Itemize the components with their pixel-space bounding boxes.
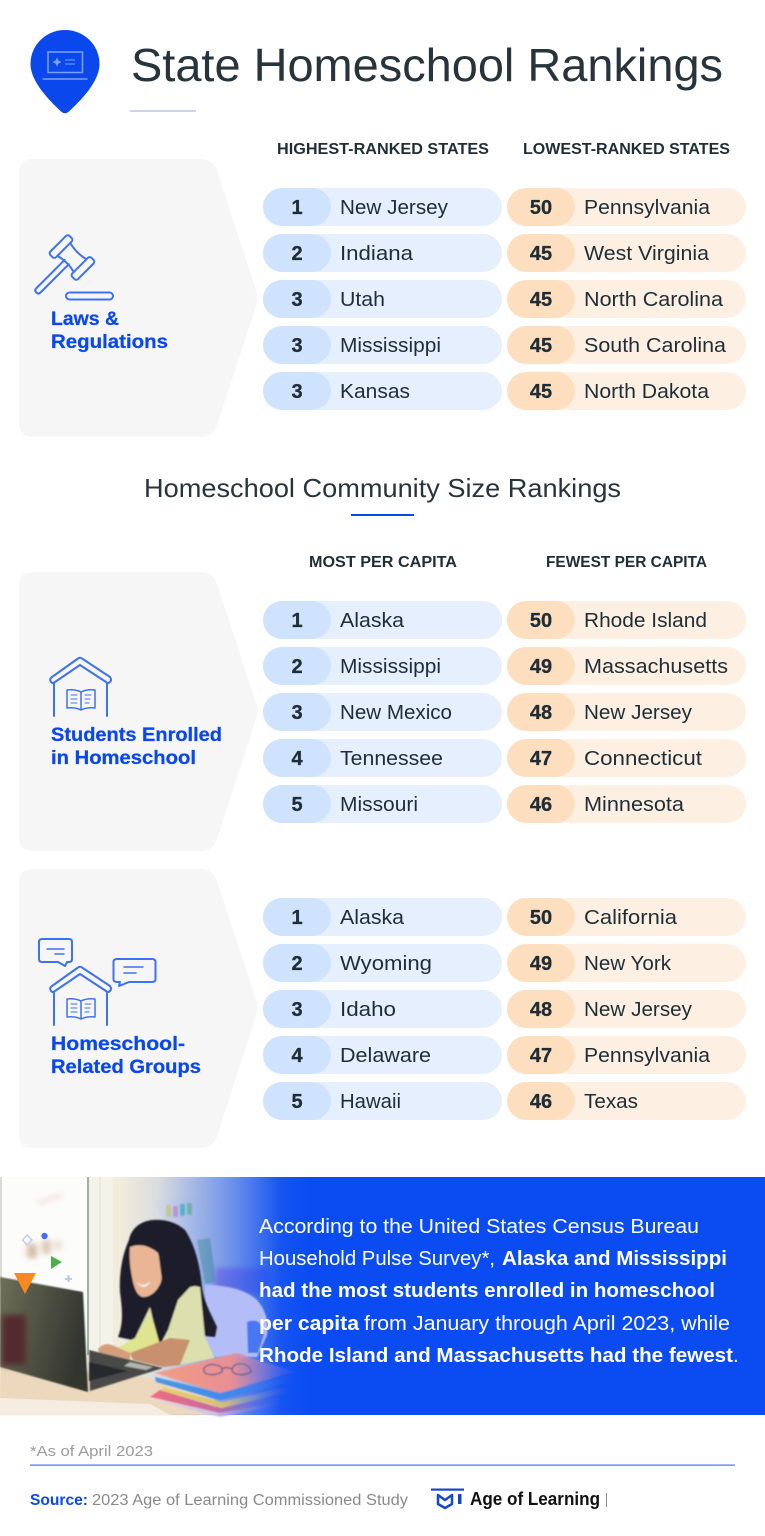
chair cushion [205,1285,268,1357]
source line: Source: [30,1492,88,1509]
rows: most per capita: Mississippi [340,655,441,678]
rows: groups fewest: 50 [530,907,552,929]
label: homeschool-related groups: Homeschool- [51,1033,185,1055]
photo: girl at laptop [0,1177,310,1417]
rows: laws lowest-ranked: 45 [530,243,552,265]
rows: groups fewest: Pennsylvania [584,1044,711,1067]
rows: groups fewest: New York [584,952,672,975]
rows: laws highest-ranked: 3 [291,335,303,357]
panel: homeschool-related groups [19,869,258,1148]
callout text: Rhode Island and Massachusetts had the fewest [259,1344,733,1367]
column headers: per capita: FEWEST PER CAPITA [546,554,707,571]
label: students enrolled in homeschool [51,724,222,769]
column headers: per capita [309,554,707,571]
icon: house with book [50,658,111,716]
callout text: from January through April 2023, while [364,1312,730,1335]
rows: laws highest-ranked: 1 [291,197,303,219]
source line: 2023 Age of Learning Commissioned Study [92,1492,408,1509]
rows: fewest per capita: 46 [530,794,552,816]
icon: gavel [23,234,113,307]
section heading: community size: Homeschool Community Size Rankings [144,473,621,503]
rows: most per capita: 1 [291,610,303,632]
rows: fewest per capita: 49 [530,656,552,678]
rows: groups fewest [507,898,746,1120]
label: laws and regulations [51,308,168,353]
column headers: per capita: MOST PER CAPITA [309,554,457,571]
panel: students enrolled in homeschool [19,572,258,851]
rows: most per capita: 2 [291,656,303,678]
table [0,1362,215,1415]
rows: laws highest-ranked: 2 [291,243,303,265]
rows: groups most: 3 [291,999,303,1021]
rows: laws lowest-ranked [507,188,746,410]
rows: groups fewest: 47 [530,1045,552,1067]
footnote: *As of April 2023 [30,1443,153,1460]
title underline [130,110,196,112]
rows: fewest per capita: New Jersey [584,701,693,724]
section heading underline [351,514,414,516]
rows: most per capita: New Mexico [340,701,452,724]
callout text: . [733,1344,739,1367]
rows: laws lowest-ranked: Pennsylvania [584,196,711,219]
rows: fewest per capita [507,601,746,823]
rows: fewest per capita: 47 [530,748,552,770]
rows: laws highest-ranked: Kansas [340,380,410,403]
column headers: laws [277,141,730,158]
rows: most per capita: Tennessee [340,747,443,770]
rows: groups most [263,898,502,1120]
rows: groups most: 2 [291,953,303,975]
panel: laws and regulations [19,159,258,437]
rows: most per capita: 5 [291,794,303,816]
rows: groups fewest: Texas [584,1090,638,1113]
rows: laws highest-ranked: 3 [291,381,303,403]
rows: laws highest-ranked: New Jersey [340,196,449,219]
rows: fewest per capita: Connecticut [584,747,702,770]
rows: groups fewest: 46 [530,1091,552,1113]
rows: laws lowest-ranked: 45 [530,289,552,311]
rows: most per capita: Missouri [340,793,418,816]
rows: groups most: Hawaii [340,1090,401,1113]
rows: groups fewest: New Jersey [584,998,693,1021]
girl [98,1220,217,1367]
callout text [259,1215,739,1367]
callout text: had the most students enrolled in homeschool [259,1279,715,1302]
rows: fewest per capita: 48 [530,702,552,724]
rows: fewest per capita: 50 [530,610,552,632]
rows: groups fewest: 49 [530,953,552,975]
rows: laws lowest-ranked: North Carolina [584,288,724,311]
rows: groups most: Wyoming [340,952,432,975]
footer rule [30,1464,735,1466]
label: homeschool-related groups [51,1033,201,1078]
icon: plus [65,1275,72,1282]
callout text: According to the United States Census Bureau [259,1215,699,1238]
logo: Age of Learning: Age of Learning [470,1488,600,1509]
rows: groups fewest: California [584,906,678,929]
label: homeschool-related groups: Related Groups [51,1056,201,1078]
callout text: Household Pulse Survey*, [259,1247,495,1270]
rows: laws lowest-ranked: 45 [530,335,552,357]
icon: diamond [22,1235,32,1245]
rows: most per capita: 3 [291,702,303,724]
rows: laws lowest-ranked: 45 [530,381,552,403]
column headers: laws: HIGHEST-RANKED STATES [277,141,489,158]
rows: most per capita: 4 [291,748,303,770]
book stack with glasses [150,1353,295,1417]
column headers: laws: LOWEST-RANKED STATES [523,141,730,158]
rows: groups most: Alaska [340,906,405,929]
icon: orange triangle [14,1273,36,1294]
rows: laws lowest-ranked: South Carolina [584,334,727,357]
rows: groups fewest: 48 [530,999,552,1021]
rows: groups most: Delaware [340,1044,431,1067]
icon: house with speech bubbles [39,939,156,1025]
rows: laws lowest-ranked: 50 [530,197,552,219]
poster on wall [153,1198,217,1285]
rows: laws lowest-ranked: West Virginia [584,242,710,265]
rows: fewest per capita: Rhode Island [584,609,707,632]
title: State Homeschool Rankings [131,39,723,91]
blurred shelf [215,1268,270,1294]
rows: laws highest-ranked [263,188,502,410]
rows: laws highest-ranked: Mississippi [340,334,441,357]
laptop [0,1277,163,1392]
label: laws and regulations: Regulations [51,331,168,353]
rows: laws highest-ranked: 3 [291,289,303,311]
banner: photo and census callout [0,1177,765,1417]
rows: most per capita: Alaska [340,609,405,632]
rows: fewest per capita: Massachusetts [584,655,728,678]
rows: most per capita [263,601,502,823]
callout text: Alaska and Mississippi [502,1247,727,1270]
rows: laws highest-ranked: Utah [340,288,385,311]
callout text: per capita [259,1312,360,1335]
icon: blue dot [41,1233,48,1239]
rows: groups most: 1 [291,907,303,929]
rows: laws highest-ranked: Indiana [340,242,414,265]
rows: groups most: 4 [291,1045,303,1067]
rows: groups most: 5 [291,1091,303,1113]
icon: location pin with laptop [30,30,100,113]
label: laws and regulations: Laws & [51,308,119,330]
icon: green triangle [51,1256,62,1269]
rows: fewest per capita: Minnesota [584,793,685,816]
label: students enrolled in homeschool: Students Enrolled [51,724,222,746]
rows: groups most: Idaho [340,998,396,1021]
rows: laws lowest-ranked: North Dakota [584,380,710,403]
label: students enrolled in homeschool: in Homeschool [51,747,196,769]
